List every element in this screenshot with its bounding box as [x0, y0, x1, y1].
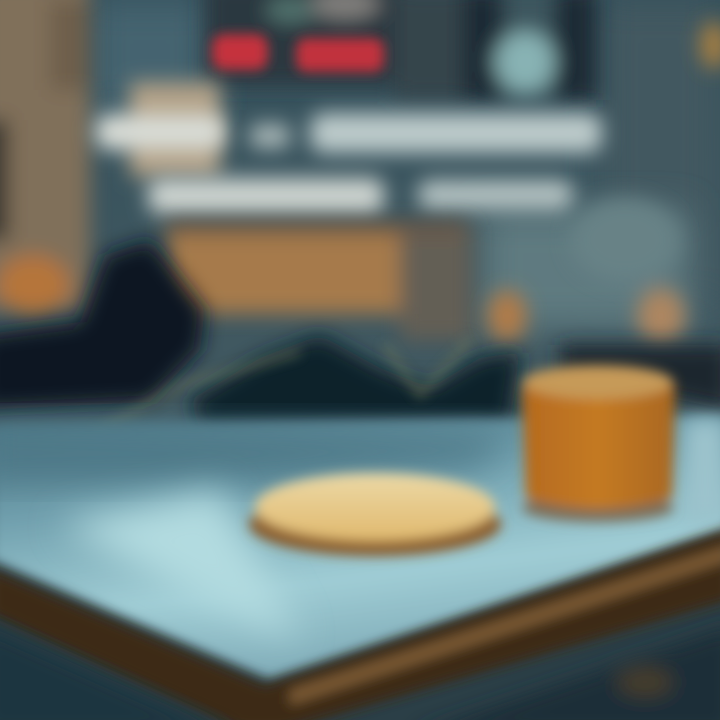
dark upper windows — [205, 0, 720, 100]
glowing lamps — [487, 198, 685, 344]
dark foreground shapes — [0, 240, 720, 430]
orange cylinder — [522, 365, 675, 522]
bottom dark floor — [0, 622, 720, 720]
orange wooden panel — [165, 222, 472, 340]
table surface — [0, 415, 720, 680]
thin branch — [60, 340, 470, 455]
left wooden column — [0, 0, 90, 315]
background wall — [0, 0, 720, 440]
cookie on table — [249, 473, 501, 556]
heading: blurred white title lines — [95, 82, 602, 214]
table wood edge — [0, 528, 720, 720]
heading: red blurred title band — [212, 34, 384, 72]
